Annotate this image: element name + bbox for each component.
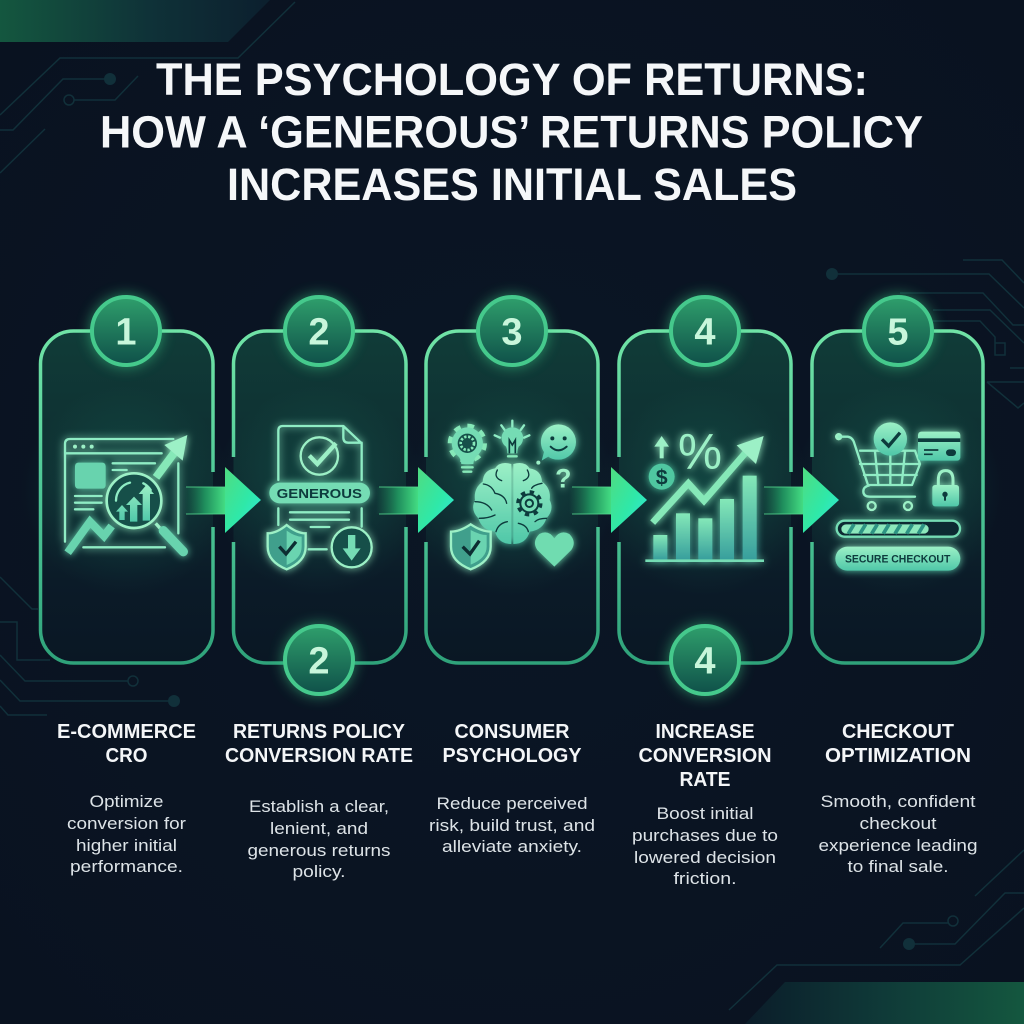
step 2 heading: RETURNS POLICY: [233, 720, 405, 743]
title: THE PSYCHOLOGY OF RETURNS:: [156, 54, 868, 105]
number badge 2: [283, 295, 355, 367]
step 4 description: [632, 804, 778, 888]
icon: rising bar chart with percent and dollar: $: [656, 465, 668, 489]
step 3 heading: CONSUMER: [454, 720, 570, 743]
step 1 description: Optimize: [90, 792, 164, 811]
step 1 description: conversion for: [67, 814, 186, 833]
icon: brain with gear, bulb, smile, shield and heart: [450, 421, 576, 569]
lower number badge 4: 4: [694, 640, 716, 682]
step 4 heading: [638, 720, 772, 791]
panel: step 4: [600, 331, 810, 663]
number badge 5: [862, 295, 934, 367]
arrow 1 to 2: [183, 467, 261, 533]
title: INCREASES INITIAL SALES: [227, 159, 797, 210]
step 3 description: risk, build trust, and: [429, 816, 595, 835]
icon: rising bar chart with percent and dollar: [645, 423, 764, 561]
step 2 description: generous returns: [248, 841, 390, 860]
icon: cart, card, lock and secure checkout: [835, 422, 960, 571]
step 4 description: purchases due to: [632, 826, 778, 845]
step 3 description: Reduce perceived: [436, 794, 588, 813]
step 1 description: performance.: [70, 857, 183, 876]
number badge 4: [669, 295, 741, 367]
step 5 heading: CHECKOUT: [842, 720, 954, 743]
step 2 description: policy.: [292, 862, 346, 881]
panel: step 2: [214, 331, 424, 663]
number badge 4: 4: [694, 312, 716, 354]
step 5 heading: OPTIMIZATION: [825, 744, 971, 767]
panel: step 5: [793, 331, 1003, 663]
icon: generous returns document: [268, 426, 372, 569]
number badge 1: 1: [115, 312, 137, 354]
bottom-right corner band: [745, 982, 1024, 1024]
icon: cart, card, lock and secure checkout: SECURE CHECKOUT: [845, 554, 950, 566]
arrow 2 to 3: [376, 467, 454, 533]
step 5 description: Smooth, confident: [820, 792, 976, 811]
step 1 heading: CRO: [106, 744, 148, 767]
step 5 description: checkout: [860, 814, 937, 833]
step 1 heading: E-COMMERCE: [57, 720, 196, 743]
panel: step 1: [22, 331, 232, 663]
step 4 heading: CONVERSION: [638, 744, 772, 767]
step 2 heading: CONVERSION RATE: [225, 744, 413, 767]
step 3 description: [429, 794, 595, 856]
lower number badge 2: 2: [308, 640, 330, 682]
step 5 description: to final sale.: [848, 857, 948, 876]
step 2 description: Establish a clear,: [249, 797, 389, 816]
step 1 heading: [57, 720, 196, 767]
number badge 3: 3: [501, 312, 523, 354]
step 1 description: [67, 792, 186, 876]
arrow 3 to 4: [569, 467, 647, 533]
icon: rising bar chart with percent and dollar: %: [678, 423, 722, 479]
step 4 heading: RATE: [680, 768, 730, 791]
lower number badge 2: [283, 624, 355, 696]
number badge 1: [90, 295, 162, 367]
icon: generous returns document: GENEROUS: [277, 487, 362, 501]
arrow 4 to 5: [761, 467, 839, 533]
step 5 description: experience leading: [818, 836, 978, 855]
step 2 description: [248, 797, 390, 881]
step 3 heading: PSYCHOLOGY: [442, 744, 582, 767]
step 1 description: higher initial: [76, 836, 177, 855]
step 4 description: lowered decision: [634, 848, 776, 867]
step 3 description: alleviate anxiety.: [442, 837, 582, 856]
icon: brain with gear, bulb, smile, shield and heart: ?: [555, 463, 571, 493]
lower number badge 4: [669, 624, 741, 696]
step 3 heading: [442, 720, 582, 767]
step 4 description: friction.: [674, 869, 736, 888]
title: HOW A ‘GENEROUS’ RETURNS POLICY: [100, 106, 923, 158]
step 4 description: Boost initial: [656, 804, 754, 823]
number badge 5: 5: [887, 312, 909, 354]
step 2 description: lenient, and: [270, 819, 368, 838]
panel: step 3: [407, 331, 617, 663]
step 2 heading: [225, 720, 413, 767]
step 5 description: [818, 792, 978, 876]
title: [100, 54, 923, 210]
step 5 heading: [825, 720, 971, 767]
step 4 heading: INCREASE: [656, 720, 754, 743]
number badge 3: [476, 295, 548, 367]
number badge 2: 2: [308, 312, 330, 354]
icon: browser with magnifier and growth arrow: [65, 435, 187, 553]
top-left corner band: [0, 0, 270, 42]
